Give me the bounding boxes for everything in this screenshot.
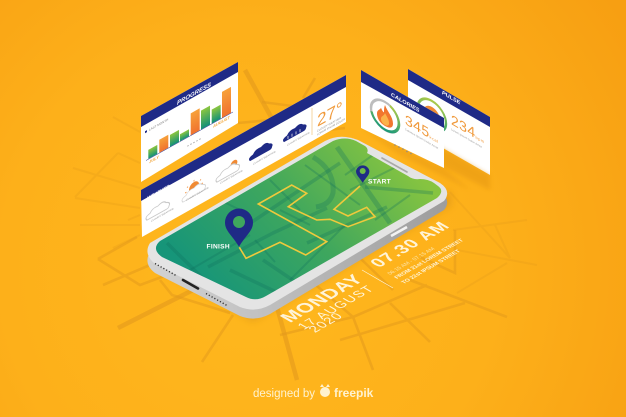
phone side <box>147 146 447 319</box>
route to: TO 22st IPSUM STREET <box>401 249 463 285</box>
bar chart <box>146 86 233 170</box>
legend: LAST MONTH <box>149 117 169 132</box>
calories value: Calories Ipsum Dolor Amet <box>405 127 438 150</box>
weather captions: CLOUDY WEATHER <box>253 150 276 166</box>
pulse value: 234bpm <box>451 112 485 147</box>
phone shadow <box>148 190 452 322</box>
pulse value: Lorem Ipsum Dolor Amet <box>451 127 482 149</box>
side button <box>391 227 407 236</box>
map roads on screen <box>167 147 433 310</box>
calories shadow <box>361 128 470 190</box>
pulse ring <box>418 93 446 137</box>
speaker <box>382 158 407 172</box>
time: 07.30 AM <box>365 218 454 270</box>
icon: sunny cloud small <box>216 157 240 183</box>
charging port <box>183 280 198 288</box>
bar chart: JULY <box>149 154 160 164</box>
weather heading: WEATHER <box>147 183 170 202</box>
pin: start <box>356 165 369 183</box>
weather captions: CLOUDY WEATHER <box>186 186 209 202</box>
icon: dark cloud <box>249 139 273 162</box>
panel: calories <box>361 70 470 190</box>
weather captions <box>151 131 310 223</box>
icon: cloud outline <box>146 198 170 221</box>
divider <box>311 108 313 135</box>
progress heading: PROGRESS <box>177 81 212 107</box>
route from: FROM 21st LOREM STREET <box>394 238 466 280</box>
screen <box>156 138 442 300</box>
panel: weather <box>141 75 346 237</box>
label: start: START <box>368 178 391 186</box>
temperature: LOREM IPSUM DOLOR <box>317 117 345 136</box>
year: 2020 <box>305 310 347 335</box>
panel: pulse <box>408 69 490 190</box>
calories value: 345kcal <box>405 112 438 147</box>
icon: rain cloud <box>283 120 307 143</box>
credit: freepik <box>334 386 374 400</box>
calories pagination dots <box>394 144 412 154</box>
label: finish: FINISH <box>206 244 230 250</box>
icon: sun cloud <box>182 174 206 203</box>
temperature: CLOUDY WEATHER <box>317 116 341 133</box>
credit <box>253 384 374 400</box>
route <box>239 185 375 258</box>
temperature: 27° <box>317 97 343 131</box>
weather captions: CLOUDY WEATHER <box>287 131 310 147</box>
phone <box>140 130 460 322</box>
pin: finish <box>225 208 253 247</box>
pulse shadow <box>408 128 490 190</box>
separator <box>362 270 393 288</box>
date: 17 AUGUST <box>294 283 378 332</box>
map roads background <box>73 70 537 380</box>
panel: progress <box>141 62 238 182</box>
day: MONDAY <box>276 272 369 326</box>
phone body top <box>147 137 447 310</box>
time range: 06.15 AM - 07.15 AM <box>387 247 437 276</box>
bar chart: AUGUST <box>212 115 230 129</box>
schedule text <box>276 218 466 335</box>
credit: designed by <box>253 388 315 400</box>
icon: freepik logo <box>320 384 330 397</box>
calories heading: CALORIES <box>391 92 419 114</box>
calories ring and flame <box>371 94 399 138</box>
weather captions: CLOUDY WEATHER <box>220 169 243 185</box>
weather captions: CLOUDY WEATHER <box>151 207 174 223</box>
speaker holes <box>155 264 227 306</box>
pulse heading: PULSE <box>442 90 461 107</box>
